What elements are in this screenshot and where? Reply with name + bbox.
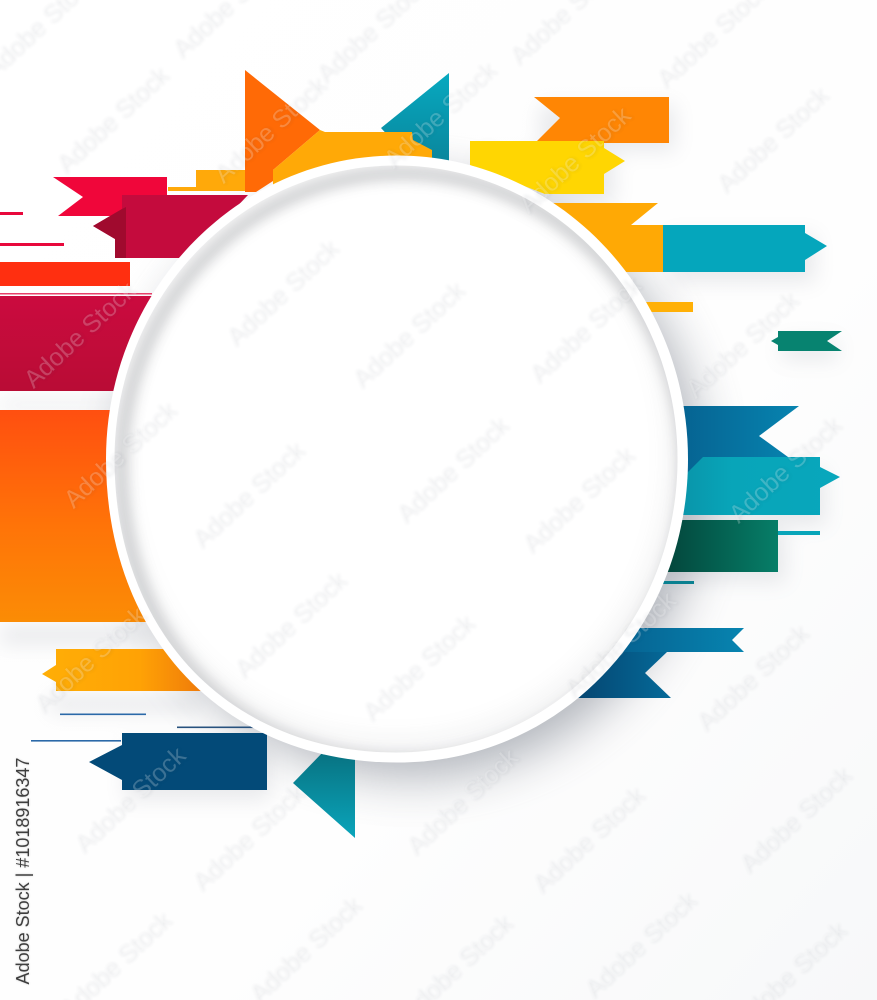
watermark text pattern: Adobe Stock	[517, 441, 639, 559]
watermark text pattern: Adobe Stock	[524, 271, 646, 389]
bar: large crimson	[0, 296, 170, 391]
watermark text pattern: Adobe Stock	[691, 619, 813, 737]
accent lines: navy	[31, 714, 262, 742]
ribbon: green block	[662, 520, 778, 572]
watermark text pattern: Adobe Stock	[514, 101, 636, 219]
ribbon: upper left red	[53, 177, 167, 216]
watermark text pattern: Adobe Stock	[59, 396, 181, 514]
triangle: teal bottom	[293, 750, 355, 838]
watermark text pattern: Adobe Stock	[187, 436, 309, 554]
bar: large orange	[0, 410, 170, 622]
watermark text pattern: Adobe Stock	[401, 743, 523, 861]
accent lines: red	[0, 212, 152, 294]
watermark text pattern: Adobe Stock	[229, 566, 351, 684]
watermark text pattern: Adobe Stock	[221, 234, 343, 352]
triangle: orange top	[245, 70, 320, 192]
vertical credit text: Adobe Stock | #1018916347	[13, 758, 33, 984]
accent: amber bar	[640, 302, 693, 312]
ribbon fold	[93, 207, 126, 258]
watermark text pattern: Adobe Stock	[379, 56, 501, 174]
watermark text pattern: Adobe Stock	[51, 61, 173, 179]
ribbon: amber right	[550, 203, 663, 272]
colourful ribbon artwork around circle	[0, 70, 842, 838]
ribbon: blue lower right lower	[570, 652, 671, 698]
watermark text pattern: Adobe Stock	[391, 411, 513, 529]
ribbon: teal right	[663, 225, 827, 272]
watermark text pattern: Adobe Stock	[19, 276, 141, 394]
watermark text pattern: Adobe Stock	[187, 779, 309, 897]
ribbon: small green	[771, 331, 842, 351]
ribbon: blue right	[670, 406, 799, 480]
watermark text pattern: Adobe Stock	[681, 286, 803, 404]
watermark text pattern: Adobe Stock	[527, 781, 649, 899]
ribbon: crimson upper left	[93, 195, 248, 258]
watermark text pattern: Adobe Stock	[559, 586, 681, 704]
panel: central white circle	[100, 150, 700, 770]
watermark text pattern: Adobe Stock	[711, 81, 833, 199]
ribbon: amber lower left	[42, 649, 220, 691]
watermark text pattern: Adobe Stock	[724, 411, 846, 529]
circle inner face with edge shadow	[114, 166, 678, 752]
ribbon: navy lower left	[89, 733, 267, 790]
ribbon: amber top arc	[273, 130, 432, 190]
watermark text pattern: Adobe Stock	[357, 609, 479, 727]
bar: red orange	[0, 262, 130, 286]
watermark text pattern: Adobe Stock	[734, 761, 856, 879]
watermark text pattern: Adobe Stock	[29, 601, 151, 719]
watermark text pattern: Adobe Stock	[209, 71, 331, 189]
triangle: teal top	[381, 73, 449, 170]
ribbon: teal lower right	[660, 457, 840, 515]
ribbon: blue lower right upper	[610, 628, 744, 652]
soft ribbon shadows	[0, 105, 837, 800]
accent lines: teal	[640, 531, 820, 584]
ribbon: small amber steps	[168, 170, 246, 191]
ribbon: yellow top right	[470, 141, 625, 194]
panel: circle drop shadow	[122, 178, 702, 778]
watermark text pattern: Adobe Stock	[347, 276, 469, 394]
ribbon: orange top right	[534, 97, 669, 143]
watermark text pattern: Adobe Stock	[69, 741, 191, 859]
circle outer ring	[106, 156, 688, 762]
